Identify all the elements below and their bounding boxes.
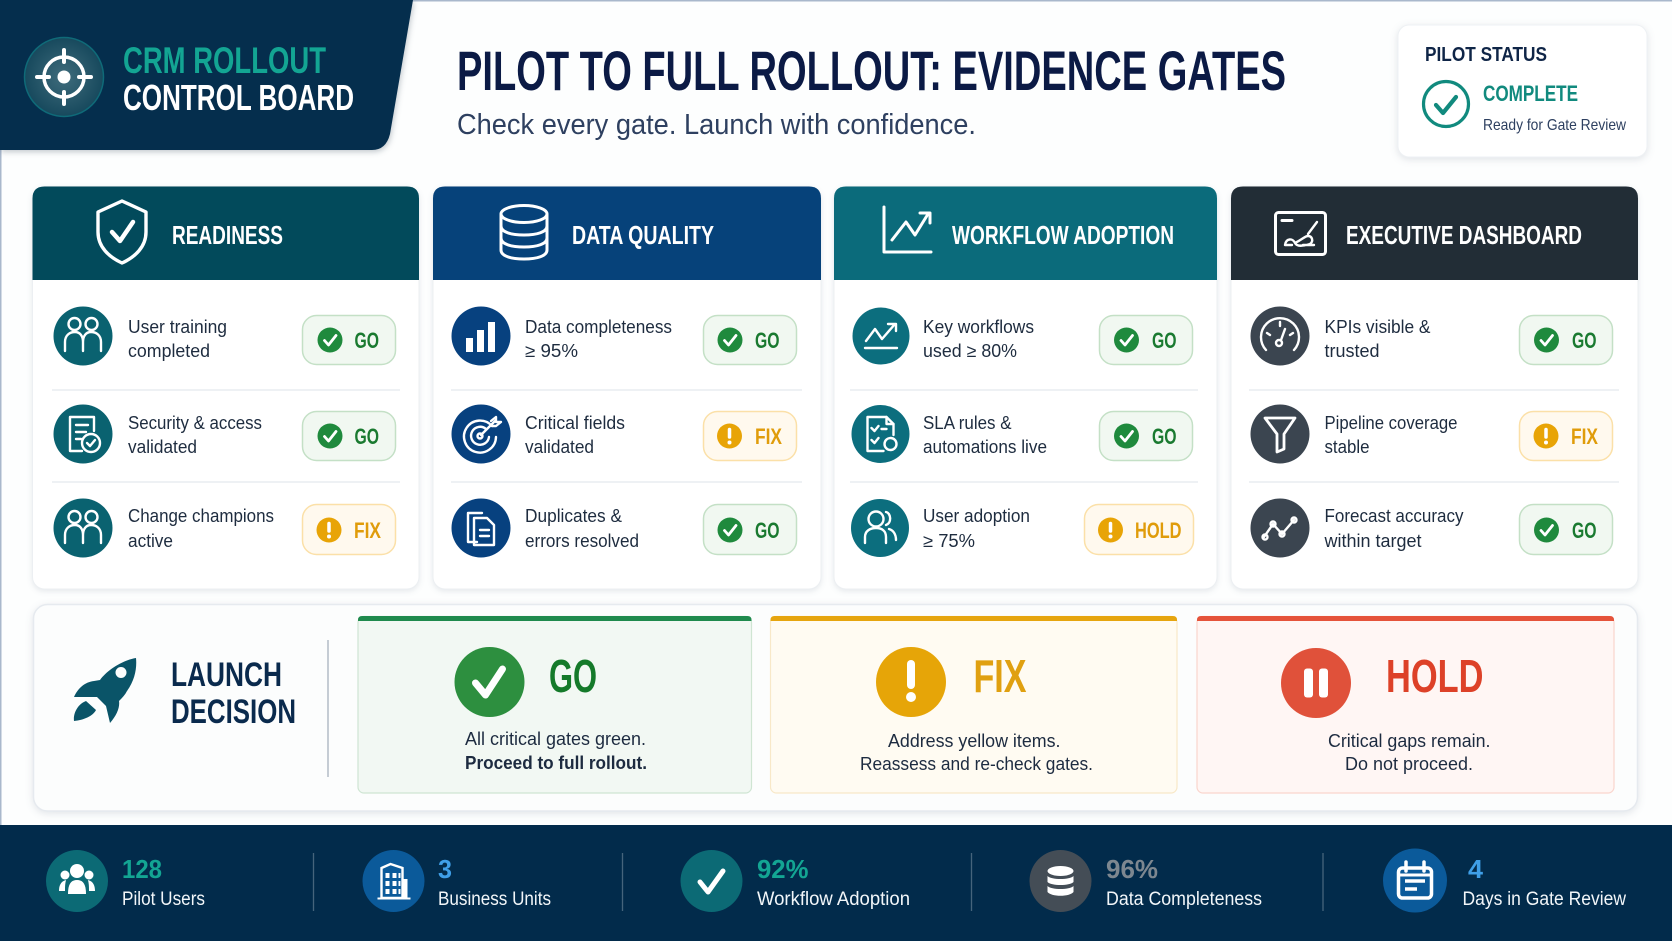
row: pipeline: Pipeline coverage bbox=[1324, 413, 1458, 433]
row: security and access: validated bbox=[128, 437, 197, 457]
card: go: Proceed to full rollout. bbox=[465, 753, 647, 773]
panel: executive dashboard bbox=[1231, 186, 1638, 589]
heading: DATA QUALITY bbox=[572, 220, 714, 250]
metric: workflow adoption: 92% bbox=[757, 854, 808, 884]
icon: hold pause bbox=[1281, 648, 1351, 718]
card: hold: Do not proceed. bbox=[1345, 754, 1473, 774]
row: user adoption: User adoption bbox=[923, 506, 1030, 526]
card: fix: FIX bbox=[974, 650, 1027, 702]
row: security and access bbox=[54, 404, 396, 464]
card: go: All critical gates green. bbox=[465, 729, 646, 749]
metric: pilot users: 128 bbox=[122, 854, 162, 884]
row: duplicates and errors: errors resolved bbox=[525, 531, 639, 551]
row: user training: User training bbox=[128, 317, 227, 337]
header banner bbox=[0, 0, 413, 150]
launch decision heading bbox=[171, 656, 296, 731]
panel: pilot status: Ready for Gate Review bbox=[1483, 117, 1626, 134]
row: data completeness: Data completeness bbox=[525, 317, 672, 337]
row: key workflows: GO bbox=[1152, 328, 1176, 353]
metric: days in gate review: 4 bbox=[1468, 854, 1484, 884]
subtitle: Check every gate. Launch with confidence. bbox=[457, 109, 976, 141]
row: forecast accuracy bbox=[1250, 498, 1612, 558]
row: critical fields bbox=[452, 404, 796, 464]
metric: pilot users bbox=[46, 850, 205, 912]
row: key workflows: used ≥ 80% bbox=[923, 341, 1017, 361]
panel: launch decision bbox=[34, 604, 1638, 811]
panel: workflow adoption bbox=[834, 186, 1217, 589]
icon: fix exclamation bbox=[876, 647, 946, 717]
footer metrics bar bbox=[0, 825, 1672, 941]
banner title bbox=[123, 40, 354, 118]
card: hold: HOLD bbox=[1386, 650, 1484, 702]
row: kpis: GO bbox=[1572, 328, 1596, 353]
title: PILOT TO FULL ROLLOUT: EVIDENCE GATES bbox=[457, 39, 1286, 102]
metric: data completeness: Data Completeness bbox=[1106, 889, 1262, 910]
row: security and access: Security & access bbox=[128, 413, 262, 433]
card: fix: Address yellow items. bbox=[888, 731, 1060, 751]
icon: complete check bbox=[1424, 82, 1468, 126]
metric: workflow adoption: Workflow Adoption bbox=[757, 889, 910, 910]
row: user training bbox=[54, 306, 396, 366]
card: go bbox=[358, 616, 752, 793]
row: pipeline: FIX bbox=[1571, 424, 1598, 449]
row: sla rules bbox=[852, 405, 1192, 463]
banner title: CONTROL BOARD bbox=[123, 77, 354, 118]
row: pipeline bbox=[1250, 404, 1612, 464]
icon: line chart bbox=[884, 207, 931, 252]
icon: go check bbox=[454, 647, 524, 717]
panel: data quality bbox=[433, 186, 821, 589]
row: security and access: GO bbox=[354, 424, 379, 449]
row: user adoption: ≥ 75% bbox=[923, 531, 975, 551]
metric: workflow adoption bbox=[680, 850, 910, 912]
row: duplicates and errors bbox=[452, 498, 796, 558]
heading: WORKFLOW ADOPTION bbox=[952, 220, 1174, 250]
panel: pilot status: PILOT STATUS bbox=[1425, 44, 1547, 66]
icon: crosshair target bbox=[24, 38, 104, 116]
panel: readiness bbox=[32, 186, 419, 589]
metric: data completeness bbox=[1030, 850, 1262, 912]
metric: days in gate review bbox=[1383, 848, 1626, 912]
row: user training: GO bbox=[354, 328, 379, 353]
metric: days in gate review: Days in Gate Review bbox=[1462, 889, 1626, 910]
card: fix: Reassess and re-check gates. bbox=[860, 754, 1093, 774]
row: change champions: FIX bbox=[354, 518, 381, 543]
row: critical fields: validated bbox=[525, 437, 594, 457]
icon: dashboard screen bbox=[1276, 212, 1326, 254]
row: critical fields: Critical fields bbox=[525, 413, 625, 433]
launch decision heading: LAUNCH bbox=[171, 656, 282, 694]
panel: pilot status bbox=[1398, 25, 1647, 157]
metric: data completeness: 96% bbox=[1106, 854, 1158, 884]
metric: business units bbox=[362, 850, 551, 912]
launch decision heading: DECISION bbox=[171, 693, 296, 731]
row: user adoption bbox=[851, 499, 1194, 557]
heading: EXECUTIVE DASHBOARD bbox=[1346, 220, 1582, 250]
row: change champions bbox=[54, 498, 396, 558]
row: data completeness: GO bbox=[755, 328, 780, 353]
metric: pilot users: Pilot Users bbox=[122, 889, 205, 910]
row: change champions: active bbox=[128, 531, 173, 551]
row: forecast accuracy: Forecast accuracy bbox=[1324, 506, 1464, 526]
row: kpis bbox=[1250, 306, 1612, 366]
row: key workflows bbox=[852, 308, 1192, 364]
row: data completeness bbox=[452, 306, 796, 366]
row: data completeness: ≥ 95% bbox=[525, 341, 578, 361]
row: key workflows: Key workflows bbox=[923, 317, 1034, 337]
icon: rocket bbox=[74, 658, 136, 723]
icon: shield bbox=[98, 201, 146, 263]
card: go: GO bbox=[549, 650, 597, 702]
row: critical fields: FIX bbox=[755, 424, 782, 449]
row: change champions: Change champions bbox=[128, 506, 274, 526]
row: user training: completed bbox=[128, 341, 210, 361]
row: sla rules: GO bbox=[1152, 424, 1176, 449]
row: duplicates and errors: Duplicates & bbox=[525, 506, 622, 526]
row: forecast accuracy: GO bbox=[1572, 518, 1596, 543]
row: sla rules: SLA rules & bbox=[923, 413, 1012, 433]
heading: READINESS bbox=[172, 220, 283, 250]
row: kpis: KPIs visible & bbox=[1324, 317, 1430, 337]
metric: business units: 3 bbox=[438, 854, 452, 884]
row: kpis: trusted bbox=[1324, 341, 1380, 361]
metric: business units: Business Units bbox=[438, 889, 551, 910]
row: forecast accuracy: within target bbox=[1324, 531, 1422, 551]
banner title: CRM ROLLOUT bbox=[123, 40, 326, 81]
card: fix bbox=[770, 616, 1177, 793]
row: duplicates and errors: GO bbox=[755, 518, 780, 543]
row: sla rules: automations live bbox=[923, 437, 1047, 457]
panel: pilot status: COMPLETE bbox=[1483, 81, 1578, 106]
icon: database bbox=[501, 206, 547, 259]
row: user adoption: HOLD bbox=[1135, 518, 1182, 543]
card: hold bbox=[1197, 616, 1614, 793]
card: hold: Critical gaps remain. bbox=[1328, 731, 1490, 751]
row: pipeline: stable bbox=[1324, 437, 1370, 457]
